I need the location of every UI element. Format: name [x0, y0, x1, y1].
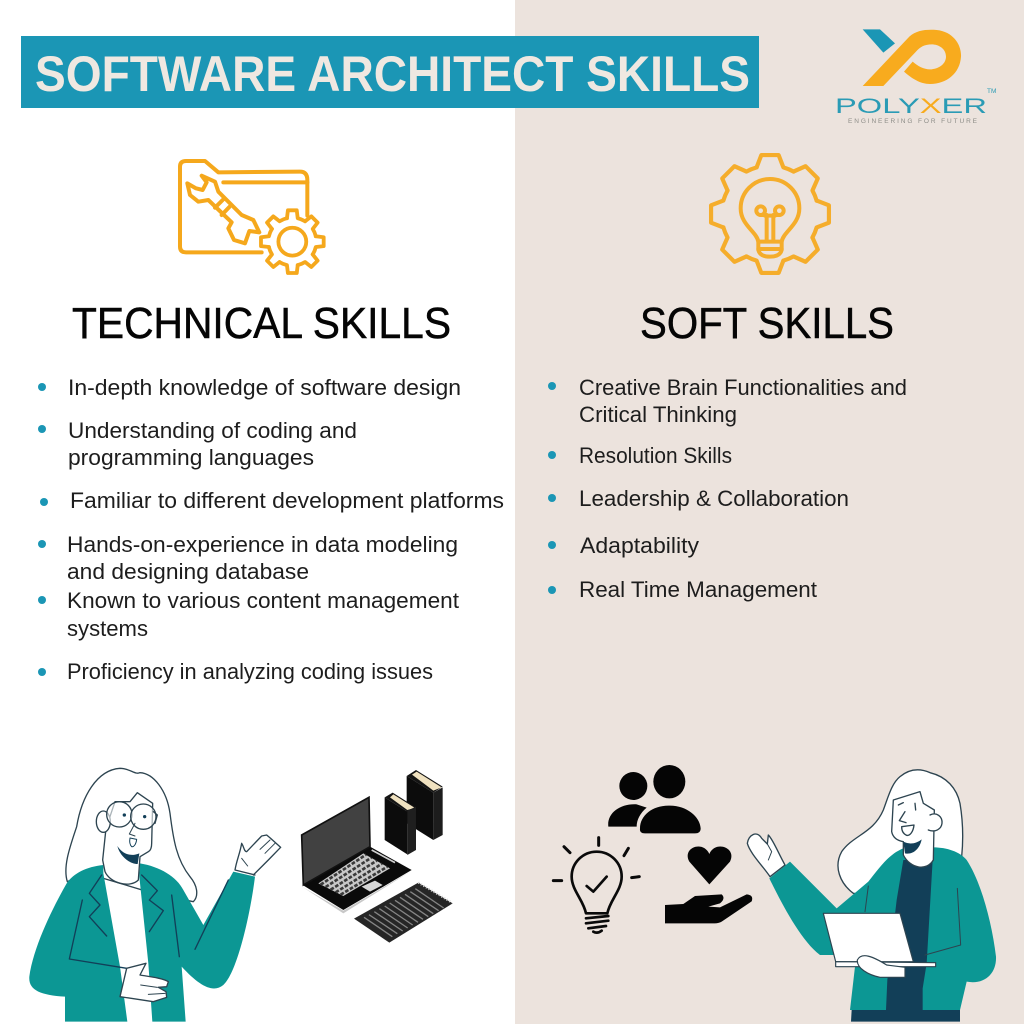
logo: Polyxer: TM	[987, 88, 996, 95]
list: technical skills: In-depth knowledge of software design	[68, 375, 461, 400]
heading: technical skills: TECHNICAL SKILLS	[72, 299, 451, 348]
list: technical skills: Proficiency in analyzing coding issues	[67, 659, 433, 684]
list: technical skills: and designing database	[67, 559, 309, 584]
list: soft skills: Creative Brain Functionalities and	[579, 375, 907, 400]
logo: Polyxer	[835, 29, 996, 125]
icon: folder with wrench and gear	[180, 161, 324, 273]
list: soft skills: Resolution Skills	[579, 443, 732, 468]
list: soft skills: Leadership & Collaboration	[579, 486, 849, 511]
icon: hand holding heart	[665, 846, 752, 923]
illustration: woman with glasses	[29, 768, 281, 1022]
icon: light bulb with check	[553, 838, 639, 933]
list: technical skills: Known to various content management	[67, 588, 459, 613]
logo: Polyxer: ENGINEERING FOR FUTURE	[848, 118, 978, 125]
heading: soft skills: SOFT SKILLS	[640, 299, 894, 348]
list: technical skills: Hands-on-experience in data modeling	[67, 532, 458, 557]
illustration: laptop, books and notebook	[302, 770, 453, 943]
list: technical skills: programming languages	[68, 445, 314, 470]
list: soft skills: Real Time Management	[579, 577, 817, 602]
list: soft skills: Critical Thinking	[579, 402, 737, 427]
laptop	[302, 797, 412, 913]
notebook	[354, 883, 453, 943]
list: technical skills	[38, 375, 504, 684]
book: front	[385, 793, 416, 855]
list: soft skills: Adaptability	[580, 533, 699, 558]
title banner: SOFTWARE ARCHITECT SKILLS	[35, 46, 750, 102]
icon: gear with light bulb	[711, 155, 829, 273]
panel: soft skills background	[515, 0, 1024, 1024]
illustration: woman holding laptop	[747, 770, 996, 1022]
logo: Polyxer: POLY X ER	[835, 95, 987, 118]
icon: two people	[608, 765, 701, 833]
list: technical skills: Familiar to different development platforms	[70, 488, 504, 513]
list: technical skills: Understanding of coding and	[68, 418, 357, 443]
list: soft skills	[548, 375, 907, 602]
book: rear	[407, 770, 443, 840]
list: technical skills: systems	[67, 616, 148, 641]
panel: technical skills background	[0, 0, 515, 1024]
